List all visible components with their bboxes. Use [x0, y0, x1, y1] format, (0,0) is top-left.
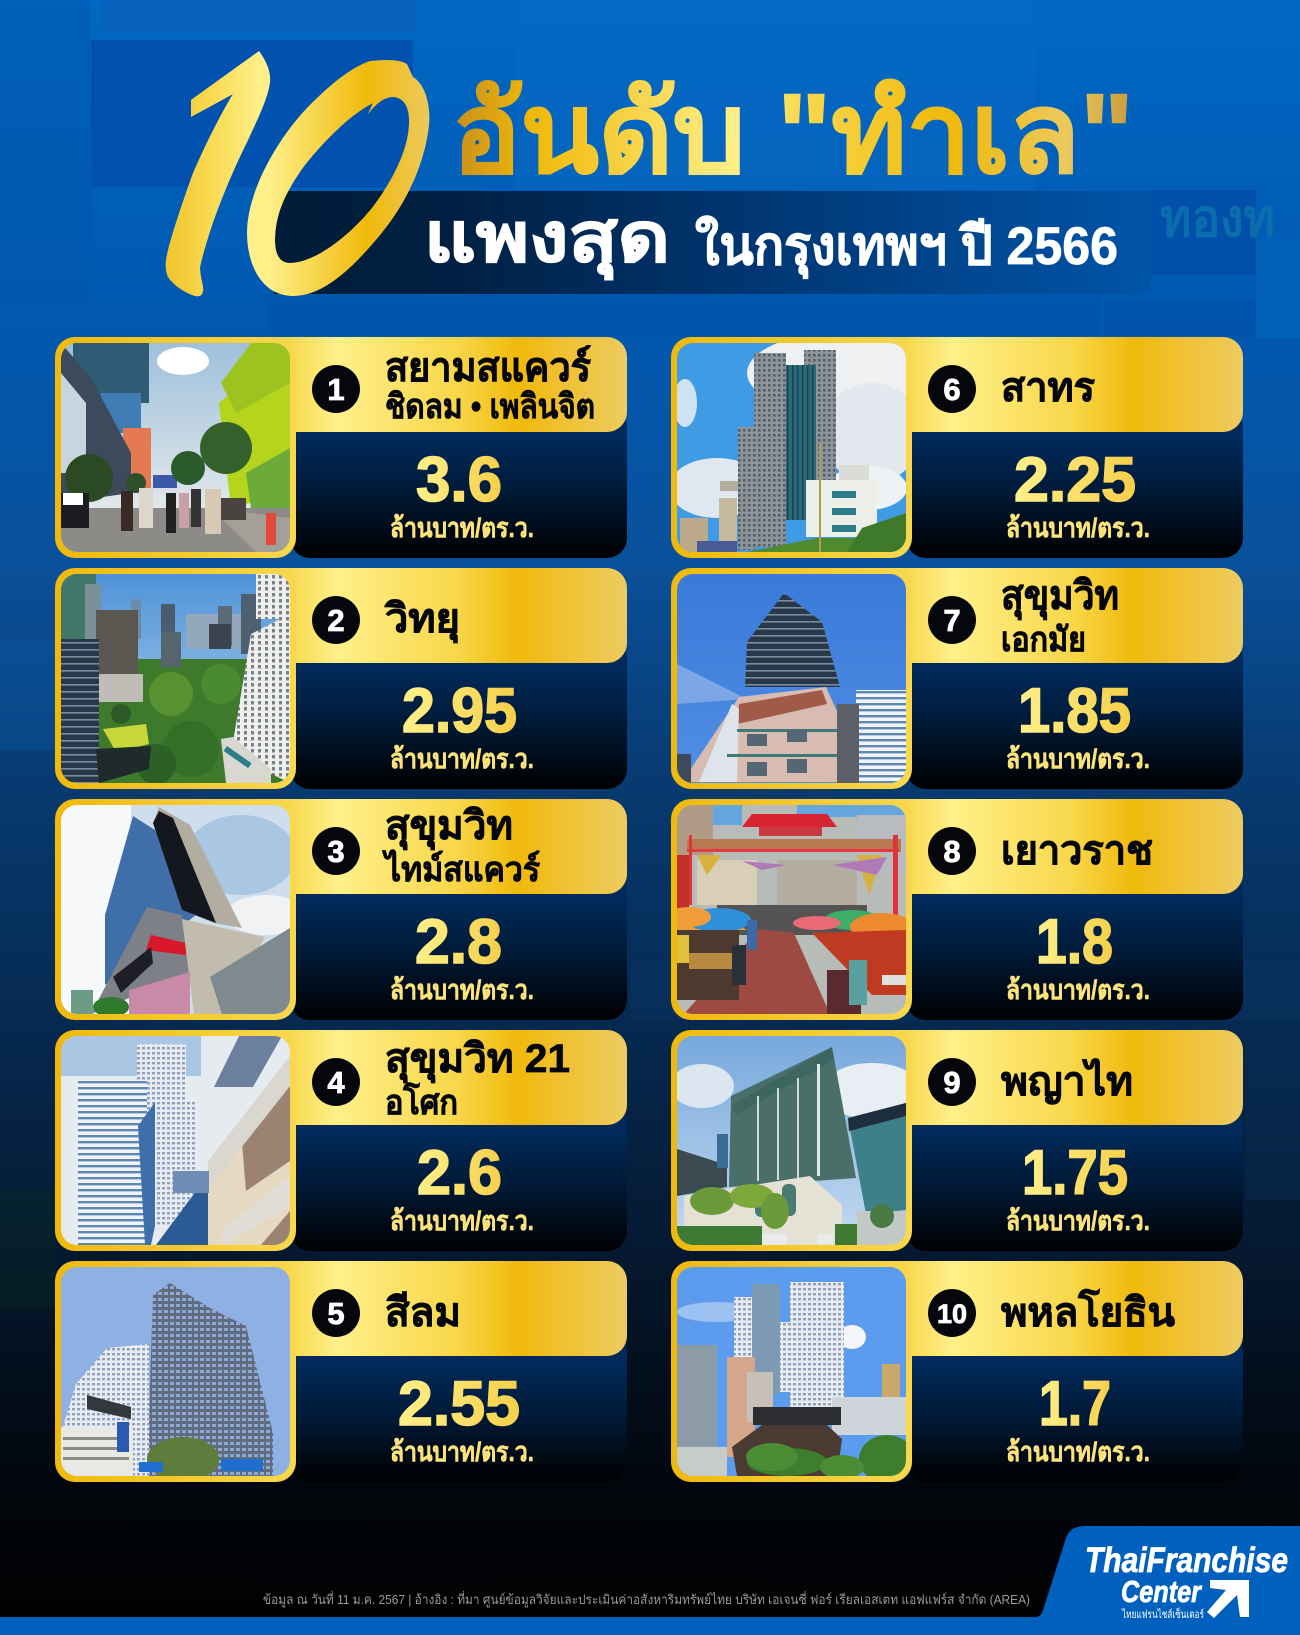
card 3: สุขุมวิท ไทม์สแควร์: 3	[327, 834, 345, 869]
photo: Asok towers	[61, 1036, 290, 1245]
name: เยาวราช	[1001, 829, 1153, 873]
card 10: พหลโยธิน: 10	[937, 1299, 967, 1329]
photo: Yaowarat market	[667, 805, 914, 1014]
name: สุขุมวิท	[385, 804, 513, 851]
photo: Phaya Thai hotel tower	[670, 1036, 922, 1245]
subtitle: ในกรุงเทพฯ ปี 2566: ในกรุงเทพฯ ปี 2566	[695, 215, 1118, 279]
card 7: สุขุมวิท เอกมัย: 7	[943, 603, 961, 638]
card 3: สุขุมวิท ไทม์สแควร์	[55, 799, 627, 1020]
subtitle: แพงสุด: แพงสุด	[424, 200, 670, 280]
price: 2.6	[417, 1138, 502, 1208]
name: พญาไท	[1001, 1058, 1133, 1105]
rank 3	[312, 827, 360, 875]
card 9: พญาไท: 9	[943, 1065, 961, 1100]
card 2: วิทยุ	[55, 568, 627, 789]
sub name: อโศก	[385, 1082, 458, 1122]
unit: ล้านบาท/ตร.ว.	[1006, 975, 1150, 1005]
background sign text: ทองท	[1160, 190, 1275, 248]
unit: ล้านบาท/ตร.ว.	[390, 1437, 534, 1467]
card 2: วิทยุ: 2	[327, 603, 345, 638]
sub name: ไทม์สแควร์	[382, 849, 541, 889]
icon: arrow	[1207, 1580, 1249, 1618]
sub name: ชิดลม • เพลินจิต	[385, 388, 595, 426]
price: 2.25	[1014, 445, 1136, 515]
photo: Ekkamai building	[677, 574, 906, 783]
photo: Times Square building	[61, 805, 306, 1017]
title: number 10: 1	[125, 0, 314, 369]
photo: Siam Square street	[61, 343, 290, 552]
name: พหลโยธิน	[1001, 1289, 1175, 1335]
rank 10	[928, 1289, 976, 1337]
price: 1.75	[1022, 1138, 1128, 1208]
unit: ล้านบาท/ตร.ว.	[390, 744, 534, 774]
unit: ล้านบาท/ตร.ว.	[390, 975, 534, 1005]
rank 4	[312, 1058, 360, 1106]
sub name: เอกมัย	[1001, 621, 1086, 659]
photo: Silom office tower	[61, 1267, 290, 1481]
logo tagline: ไทยแฟรนไชส์เซ็นเตอร์	[1121, 1607, 1204, 1621]
card 5: สีลม	[55, 1261, 627, 1482]
unit: ล้านบาท/ตร.ว.	[1006, 1437, 1150, 1467]
unit: ล้านบาท/ตร.ว.	[1006, 513, 1150, 543]
price: 1.7	[1039, 1369, 1111, 1439]
rank 8	[928, 827, 976, 875]
title: number 10	[166, 51, 430, 296]
footer blue strip	[0, 1617, 1300, 1635]
source note: ข้อมูล ณ วันที่ 11 ม.ค. 2567 | อ้างอิง : ที่มา ศูนย์ข้อมูลวิจัยและประเมินค่าอสังหาริมทรัพย์ไทย บริษัท เอเจนซี่ ฟอร์ เรียลเอสเตท แอฟแฟร์ส จำกัด (AREA)	[263, 1591, 1030, 1608]
photo: Phahon Yothin condos	[677, 1267, 915, 1483]
rank 5	[312, 1289, 360, 1337]
name: สุขุมวิท	[1001, 574, 1119, 621]
card 1: สยามสแควร์	[55, 337, 627, 558]
card 8: เยาวราช: 8	[943, 834, 961, 869]
card 6: สาทร	[669, 333, 1243, 558]
card 1: สยามสแควร์: 1	[327, 372, 345, 407]
title banner	[274, 191, 1151, 294]
card 6: สาทร: 6	[943, 372, 961, 407]
card 4: สุขุมวิท 21 อโศก: 4	[327, 1065, 345, 1100]
title: number 10: 0	[240, 0, 429, 369]
price: 2.95	[402, 676, 517, 746]
card 10: พหลโยธิน	[671, 1261, 1243, 1483]
card 4: สุขุมวิท 21 อโศก	[55, 1030, 627, 1251]
photo: Witthayu skyline	[61, 574, 290, 784]
price: 3.6	[416, 445, 502, 515]
price: 2.8	[415, 907, 502, 977]
name: สีลม	[385, 1291, 461, 1335]
logo: ThaiFranchise Center	[1020, 1526, 1300, 1635]
name: วิทยุ	[384, 597, 460, 644]
unit: ล้านบาท/ตร.ว.	[390, 513, 534, 543]
rank 7	[928, 596, 976, 644]
unit: ล้านบาท/ตร.ว.	[390, 1206, 534, 1236]
name: สาทร	[1001, 366, 1096, 410]
price: 2.55	[398, 1369, 520, 1439]
card 5: สีลม: 5	[327, 1296, 345, 1331]
name: สุขุมวิท 21	[385, 1037, 570, 1084]
card 8: เยาวราช	[667, 799, 1243, 1020]
rank 1	[312, 365, 360, 413]
photo: Sathon towers	[677, 343, 906, 552]
card 7: สุขุมวิท เอกมัย	[671, 568, 1243, 789]
unit: ล้านบาท/ตร.ว.	[1006, 1206, 1150, 1236]
name: สยามสแควร์	[385, 345, 591, 390]
rank 6	[928, 365, 976, 413]
rank 2	[312, 596, 360, 644]
unit: ล้านบาท/ตร.ว.	[1006, 744, 1150, 774]
logo center: Center	[1121, 1574, 1203, 1609]
price: 1.8	[1036, 907, 1113, 977]
price: 1.85	[1018, 676, 1131, 746]
rank 9	[928, 1058, 976, 1106]
card 9: พญาไท	[670, 1030, 1243, 1251]
title: อันดับ ทำเล: อันดับ "ทำเล"	[452, 71, 1134, 196]
